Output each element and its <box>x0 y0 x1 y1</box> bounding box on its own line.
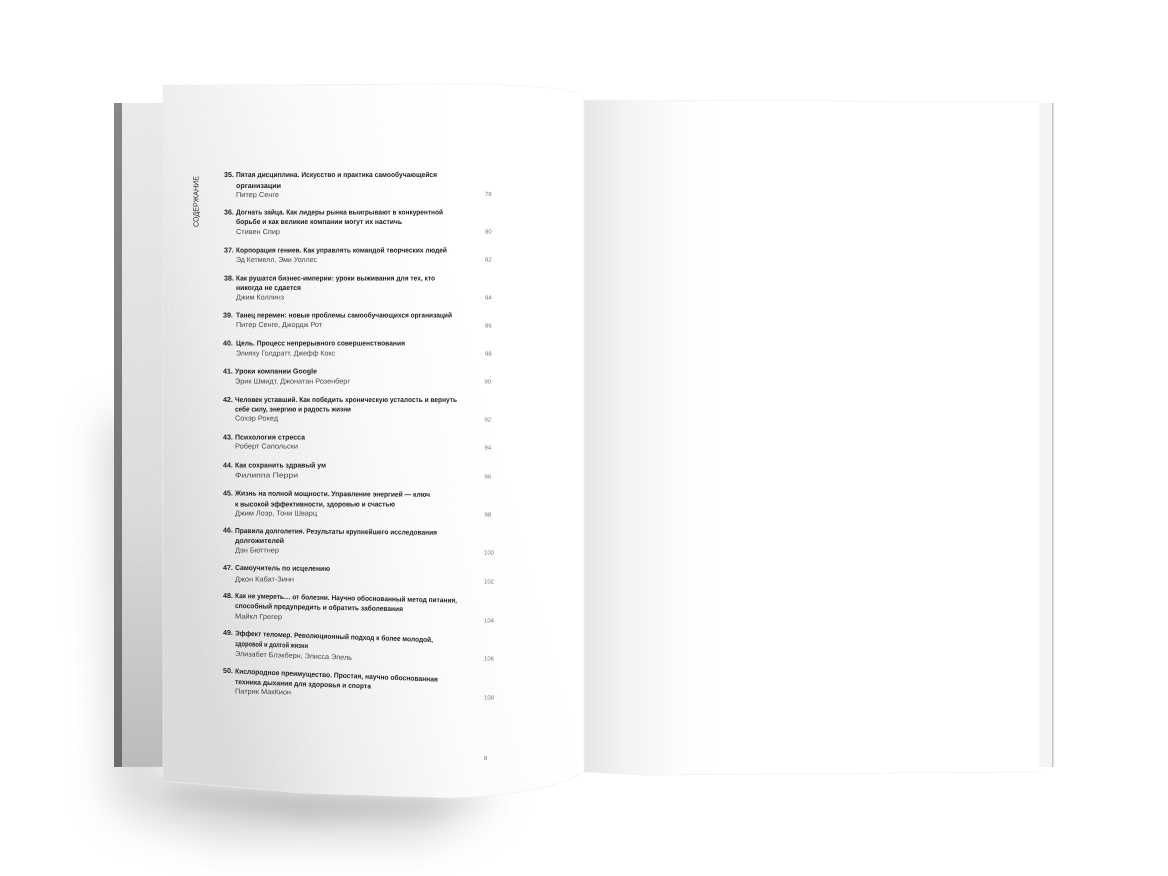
entry 46: 100 <box>484 550 495 556</box>
entry 36: борьбе и как великие компании могут их настичь <box>236 218 403 226</box>
entry 35 <box>224 171 492 199</box>
entry 42: 92 <box>484 416 492 424</box>
entry 49: 49. <box>223 629 233 637</box>
entry 44: 96 <box>484 474 492 480</box>
entry 38: 84 <box>485 294 492 302</box>
entry 44: Как сохранить здравый ум <box>235 462 326 470</box>
entry 35: 78 <box>485 191 492 198</box>
entry 36: 36. <box>224 208 234 216</box>
table of contents text <box>192 171 495 762</box>
entry 41: 41. <box>223 368 233 376</box>
entry 40: Цель. Процесс непрерывного совершенствования <box>236 340 405 348</box>
entry 45: к высокой эффективности, здоровью и счастью <box>235 500 395 508</box>
entry 40: Элияху Голдратт, Джефф Кокс <box>236 350 335 358</box>
entry 50: техника дыхания для здоровья и спорта <box>235 678 371 691</box>
entry 36: Догнать зайца. Как лидеры рынка выигрывают в конкурентной <box>236 208 443 216</box>
entry 38: Джим Коллинз <box>236 294 284 302</box>
entry 41 <box>223 368 492 386</box>
entry 47: Джон Кабат-Зинн <box>235 576 294 584</box>
entry 39: Питер Сенге, Джордж Рот <box>236 321 323 329</box>
entry 39: 39. <box>223 312 233 320</box>
entry 47: 47. <box>223 564 233 572</box>
entry 47: Самоучитель по исцелению <box>235 564 330 573</box>
entry 48: Майкл Грегер <box>235 613 282 621</box>
entry 48: 48. <box>223 592 233 600</box>
entry 45: Джим Лоэр, Тони Шварц <box>235 510 317 518</box>
entry 50 <box>223 667 495 702</box>
entry 37: Корпорация гениев. Как управлять командой творческих людей <box>236 246 447 254</box>
entry 48 <box>223 592 495 624</box>
entry 38: никогда не сдается <box>236 284 301 292</box>
entry 35: 35. <box>224 171 234 179</box>
entry 35: Пятая дисциплина. Искусство и практика самообучающейся <box>236 171 437 179</box>
entry 44: 44. <box>223 462 233 470</box>
entry 41: 90 <box>484 378 492 386</box>
entry 43: Роберт Сапольски <box>235 442 298 450</box>
entry 50: Кислородное преимущество. Простая, научно обоснованная <box>235 668 438 684</box>
entry 42: Человек уставший. Как победить хроническую усталость и вернуть <box>235 396 458 404</box>
entry 35: организации <box>236 182 281 190</box>
entry 42: 42. <box>223 396 233 404</box>
entry 44 <box>223 462 492 480</box>
left page <box>163 84 584 798</box>
entry 42 <box>223 396 492 424</box>
entry 48: 104 <box>484 618 495 624</box>
entry 38: 38. <box>224 274 234 282</box>
entry 48: способный предупредить и обратить заболевания <box>235 602 403 613</box>
entry 38: Как рушатся бизнес-империи: уроки выживания для тех, кто <box>236 274 436 282</box>
section label: СОДЕРЖАНИЕ <box>192 176 200 227</box>
entry 39: 86 <box>485 322 492 330</box>
entry 46: долгожителей <box>235 537 284 545</box>
entry 46: Дэн Бюттнер <box>235 546 279 554</box>
entry 42: Сохэр Рокед <box>235 414 279 422</box>
entry 38 <box>224 274 492 302</box>
entry 40 <box>223 340 492 358</box>
entry 43: 43. <box>223 434 233 442</box>
entry 49: Элизабет Блэкберн, Элисса Эпель <box>235 650 352 662</box>
entry 45: 45. <box>223 490 233 498</box>
entry 39 <box>223 312 492 330</box>
entry 49: Эффект теломер. Революционный подход к более молодой, <box>235 630 433 644</box>
open book mockup <box>88 84 1054 856</box>
shadow under the book <box>108 420 500 835</box>
entry 36: Стивен Спир <box>236 228 280 236</box>
entry 36 <box>224 208 492 236</box>
entry 49 <box>223 629 495 662</box>
entry 37 <box>224 246 492 264</box>
entry 42: себе силу, энергию и радость жизни <box>235 406 351 414</box>
entry 47 <box>223 564 495 586</box>
folio page number: 8 <box>484 755 488 762</box>
entry 48: Как не умереть… от болезни. Научно обоснованный метод питания, <box>235 592 457 605</box>
entry 49: 106 <box>484 656 495 662</box>
entry 41: Уроки компании Google <box>235 368 317 376</box>
entry 45: 98 <box>484 512 492 518</box>
entry 46: 46. <box>223 526 233 534</box>
right page <box>584 100 1040 775</box>
entry 37: 82 <box>485 256 492 264</box>
back block of left pages <box>114 103 166 767</box>
entry 37: 37. <box>224 246 234 254</box>
entry 40: 40. <box>223 340 233 348</box>
entry 41: Эрик Шмидт, Джонатан Розенберг <box>235 378 350 386</box>
entry 39: Танец перемен: новые проблемы самообучающихся организаций <box>236 312 452 320</box>
entry 40: 88 <box>485 350 492 358</box>
entry 50: 50. <box>223 667 233 675</box>
entry 43: 94 <box>484 444 492 452</box>
entry 46: Правила долголетия. Результаты крупнейшего исследования <box>235 527 437 537</box>
right page block edge <box>1038 103 1054 767</box>
entry 47: 102 <box>484 578 495 586</box>
entry 45: Жизнь на полной мощности. Управление энергией — ключ <box>234 489 430 499</box>
entry 36: 80 <box>485 228 492 236</box>
entry 43 <box>223 434 492 452</box>
paper grain <box>123 86 315 780</box>
entry 44: Филиппа Перри <box>235 472 298 480</box>
entry 37: Эд Кетмелл, Эми Уоллес <box>236 256 317 264</box>
entry 43: Психология стресса <box>235 434 305 442</box>
entry 50: Патрик МакКион <box>235 688 291 696</box>
entry 45 <box>223 489 492 518</box>
entry 50: 108 <box>484 694 495 702</box>
entry 49: здоровой и долгой жизни <box>235 640 308 650</box>
entry 35: Питер Сенге <box>236 191 279 199</box>
entry 46 <box>223 526 495 556</box>
